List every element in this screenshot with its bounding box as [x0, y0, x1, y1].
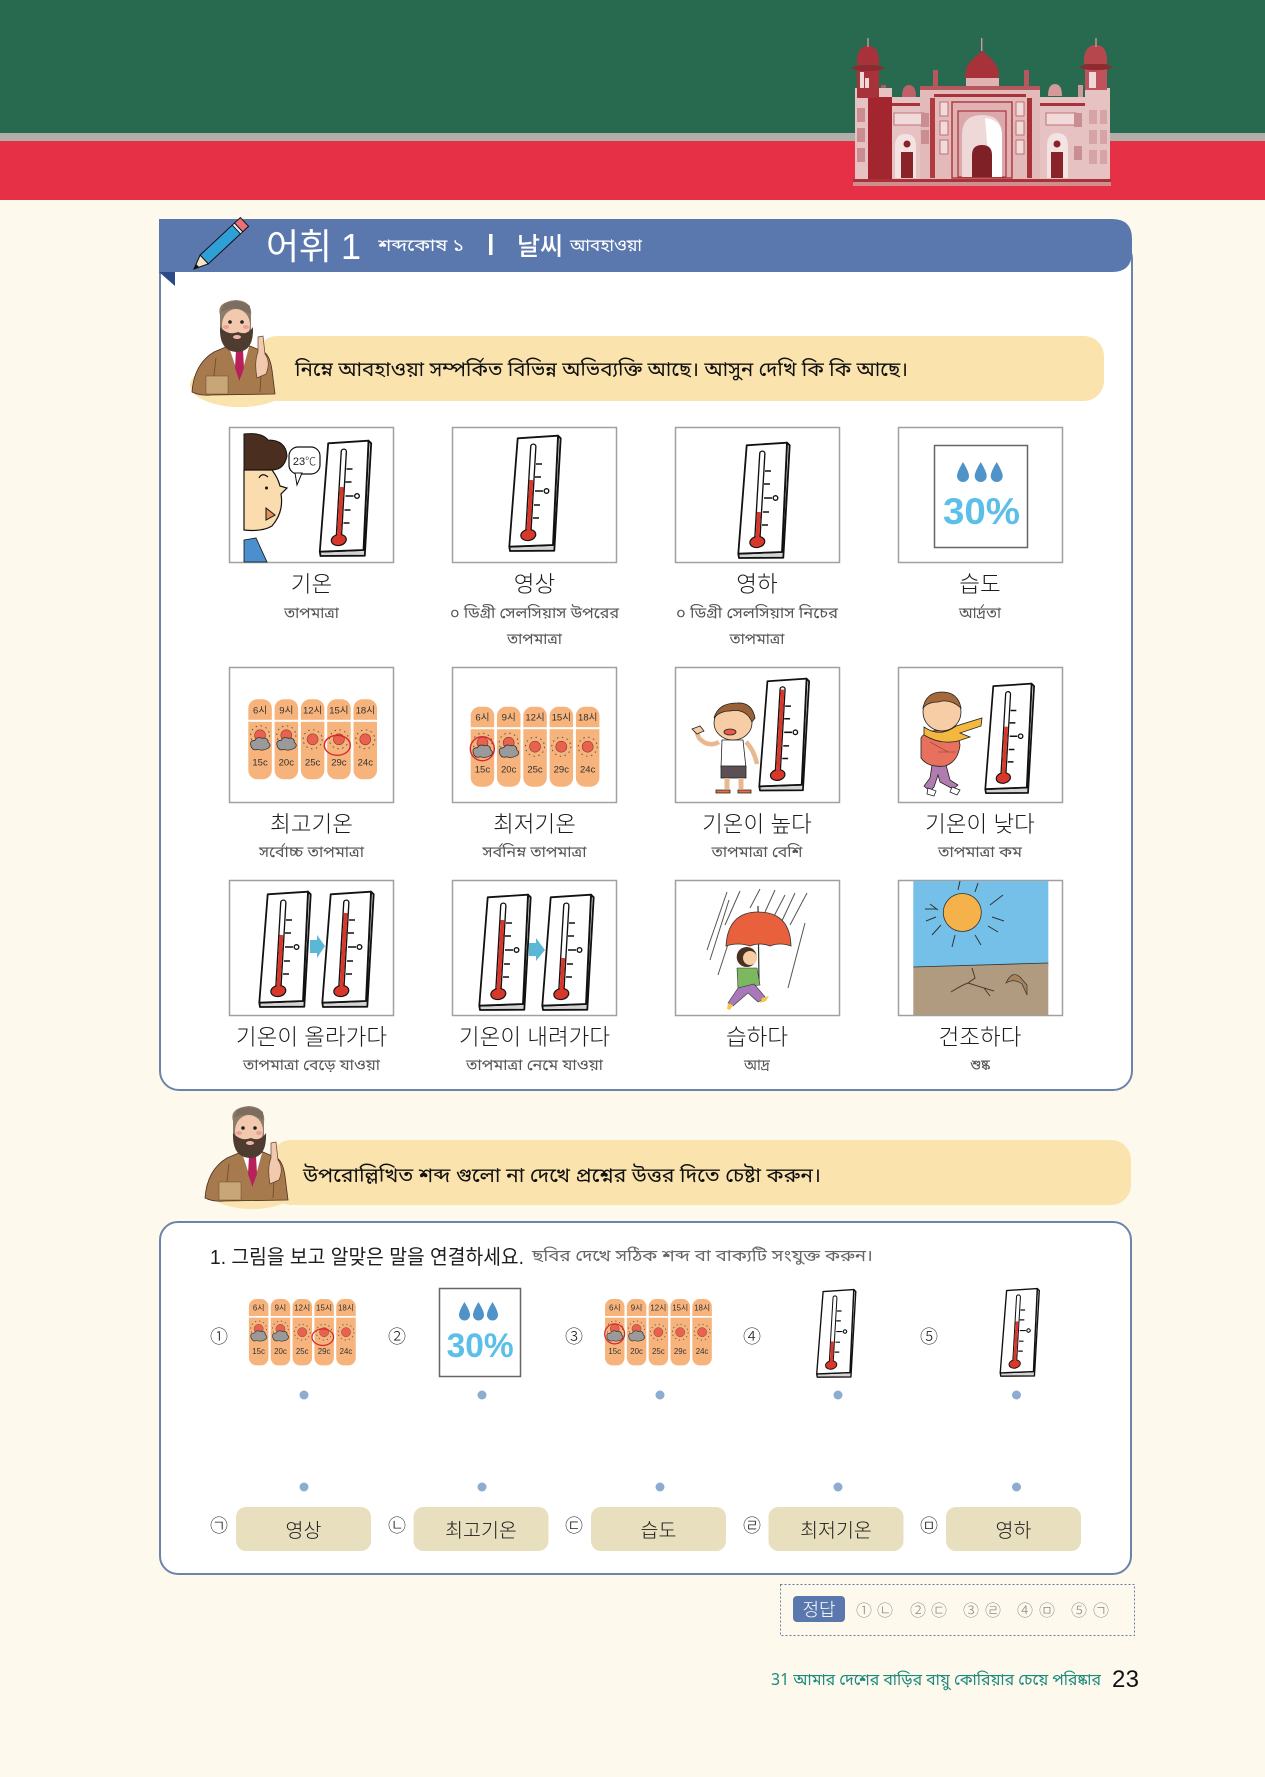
- chart: weather table: 25c: [305, 757, 321, 768]
- chart: weather table: 18시: [338, 1304, 354, 1313]
- translation: তাপমাত্রা বেড়ে যাওয়া: [242, 1057, 381, 1077]
- item 2: ②: [388, 1327, 406, 1347]
- translation: [676, 605, 839, 651]
- chart: weather table: 25c: [652, 1347, 665, 1356]
- answers: ②: [910, 1602, 926, 1620]
- chart: weather table: 12시: [303, 705, 322, 716]
- chart: weather table: 15c: [252, 757, 268, 768]
- translation: তাপমাত্রা: [283, 605, 340, 625]
- chart: weather table: 15c: [252, 1347, 265, 1356]
- chart: weather table: 15시: [552, 713, 571, 724]
- chart: weather table: 15c: [475, 765, 490, 776]
- header corner fold: [159, 272, 175, 286]
- label: 영하: [736, 572, 778, 597]
- chart: weather table: 20c: [274, 1347, 287, 1356]
- option ㉤: [920, 1507, 1081, 1551]
- answer box: [780, 1584, 1134, 1636]
- chart: weather table: 6시: [253, 705, 267, 716]
- card: temperature rises: [230, 880, 394, 1077]
- heading: Bengali weather: আবহাওয়া: [569, 235, 642, 258]
- translation: তাপমাত্রা নেমে যাওয়া: [465, 1057, 604, 1077]
- page number: 23: [1112, 1666, 1139, 1693]
- card: lowest temperature: [452, 668, 616, 864]
- label: 최고기온: [270, 812, 353, 837]
- label: 기온이 높다: [702, 812, 812, 837]
- translation: সর্বোচ্চ তাপমাত্রা: [258, 843, 365, 864]
- chart: weather table: [470, 707, 600, 787]
- translation: তাপমাত্রা: [728, 631, 786, 651]
- chart: weather table: 18시: [356, 705, 375, 716]
- card: humidity: [898, 428, 1062, 625]
- divider bar: [489, 234, 492, 255]
- icon: thermometer: [759, 679, 809, 791]
- chart: weather table: 25c: [527, 765, 543, 776]
- icon: red palace: [852, 38, 1112, 186]
- option ㉤: ㉤: [920, 1516, 938, 1536]
- translation: তাপমাত্রা: [506, 631, 563, 651]
- item 1: [210, 1299, 356, 1365]
- answers: ①: [856, 1602, 872, 1620]
- icon: sun over cracked ground: [913, 881, 1048, 1015]
- label: 기온: [291, 572, 332, 597]
- card: air temperature: [230, 428, 394, 625]
- option ㉡: ㉡: [388, 1516, 406, 1536]
- translation: তাপমাত্রা কম: [937, 844, 1023, 864]
- chart: weather table: [248, 699, 377, 779]
- chart: weather table: 15c: [608, 1347, 621, 1356]
- icon: humidity 30%: [934, 446, 1028, 548]
- card: dry: [898, 880, 1062, 1077]
- option ㉢: ㉢: [565, 1516, 583, 1536]
- option ㉠: ㉠: [210, 1516, 228, 1536]
- card: highest temperature: [230, 668, 394, 864]
- option ㉡: 최고기온: [445, 1520, 517, 1542]
- question translation: ছবির দেখে সঠিক শব্দ বা বাক্যটি সংযুক্ত করুন।: [531, 1246, 873, 1268]
- chart: weather table: 15시: [316, 1304, 332, 1313]
- icon: thermometer: [738, 443, 790, 558]
- icon: boy with umbrella in rain: [707, 889, 807, 1010]
- icon: cold boy: [921, 692, 982, 796]
- chart: weather table: [605, 1299, 712, 1365]
- icon: teacher: [205, 1106, 288, 1201]
- answer badge: 정답: [802, 1600, 836, 1620]
- icon: thermometer: [320, 441, 371, 556]
- label: 습하다: [726, 1025, 788, 1050]
- chart: weather table: 15시: [672, 1304, 688, 1313]
- translation: ০ ডিগ্রী সেলসিয়াস নিচের: [676, 605, 839, 625]
- icon: boy: 23℃: [293, 456, 316, 468]
- icon: thermometer: [817, 1290, 856, 1377]
- option ㉠: 영상: [286, 1520, 321, 1542]
- answers: [856, 1602, 1109, 1620]
- answers: ㉠: [1093, 1602, 1109, 1620]
- item 5: ⑤: [920, 1327, 938, 1347]
- chart: weather table: 12시: [650, 1304, 666, 1313]
- icon: hot boy: [692, 703, 757, 793]
- top band: green, gray, red: [0, 0, 1265, 200]
- icon: humidity 30%: 30%: [447, 1327, 514, 1365]
- label: 기온이 낮다: [925, 812, 1035, 837]
- chart: weather table: 24c: [358, 757, 373, 768]
- chart: weather table: 29c: [331, 757, 347, 768]
- option ㉡: [388, 1507, 548, 1551]
- option ㉣: 최저기온: [800, 1520, 872, 1542]
- option ㉢: [565, 1507, 726, 1551]
- translation: শুষ্ক: [970, 1057, 990, 1077]
- chart: weather table: 29c: [318, 1347, 331, 1356]
- icon: thermometer after: [322, 892, 374, 1007]
- label: 최저기온: [493, 812, 576, 837]
- chart: weather table: 20c: [501, 765, 517, 776]
- card: humid: [676, 880, 840, 1077]
- callout: try without looking: [205, 1106, 1131, 1209]
- card: temperature is high: [676, 668, 840, 864]
- card: above zero: [450, 428, 620, 651]
- icon: thermometer: [985, 684, 1034, 793]
- option ㉠: [210, 1507, 371, 1551]
- item 1: ①: [210, 1327, 228, 1347]
- item 3: [565, 1299, 712, 1365]
- chart: weather table: 9시: [631, 1304, 642, 1313]
- chart: weather table: 12시: [525, 713, 545, 724]
- icon: thermometer after: [542, 895, 594, 1010]
- label: 건조하다: [939, 1025, 1021, 1050]
- chart: weather table: 18시: [694, 1304, 710, 1313]
- label: 기온이 내려가다: [459, 1025, 610, 1050]
- heading: weather: 날씨: [517, 233, 563, 261]
- heading: Bengali vocabulary: শব্দকোষ ১: [377, 235, 464, 258]
- panel: matching exercise: [160, 1222, 1131, 1574]
- icon: pencil: [190, 218, 249, 273]
- option ㉢: 습도: [641, 1520, 676, 1542]
- chart: weather table: 29c: [554, 765, 569, 776]
- option ㉣: [743, 1507, 904, 1551]
- chart: weather table: 12시: [294, 1304, 310, 1313]
- chart: weather table: 20c: [630, 1347, 643, 1356]
- arrow: [529, 938, 545, 961]
- chart: weather table: 6시: [253, 1304, 264, 1313]
- label: 영상: [514, 572, 555, 597]
- chart: weather table: 25c: [296, 1347, 309, 1356]
- translation: আদ্র: [743, 1057, 771, 1077]
- answers: ㉢: [931, 1602, 947, 1620]
- answers: ㉡: [877, 1602, 893, 1620]
- icon: thermometer before: [479, 895, 531, 1010]
- translation: ০ ডিগ্রী সেলসিয়াস উপরের: [450, 605, 620, 625]
- option ㉤: 영하: [996, 1520, 1031, 1542]
- callout text: উপরোল্লিখিত শব্দ গুলো না দেখে প্রশ্নের উত্তর দিতে চেষ্টা করুন।: [302, 1163, 821, 1191]
- translation: তাপমাত্রা বেশি: [710, 844, 803, 864]
- option ㉣: ㉣: [743, 1516, 761, 1536]
- label: 습도: [959, 572, 1001, 597]
- card: temperature is low: [898, 668, 1062, 864]
- intro text: নিম্নে আবহাওয়া সম্পর্কিত বিভিন্ন অভিব্যক্তি আছে। আসুন দেখি কি কি আছে।: [294, 356, 908, 385]
- answers: ㉤: [1039, 1602, 1055, 1620]
- heading: vocabulary 1: 어휘 1: [266, 226, 361, 267]
- icon: boy: [244, 434, 320, 562]
- arrow: [310, 935, 325, 958]
- icon: thermometer: [509, 436, 561, 551]
- chart: weather table: 24c: [580, 765, 596, 776]
- icon: thermometer before: [259, 892, 311, 1007]
- chart: weather table: 24c: [340, 1347, 352, 1356]
- footer title: 31 আমার দেশের বাড়ির বায়ু কোরিয়ার চেয়ে পরিষ্কার: [771, 1670, 1101, 1692]
- chart: weather table: 6시: [609, 1304, 621, 1313]
- item 3: ③: [565, 1327, 583, 1347]
- chart: weather table: 9시: [502, 713, 516, 724]
- chart: weather table: 20c: [279, 757, 294, 768]
- label: 기온이 올라가다: [236, 1025, 387, 1050]
- question: 1. 그림을 보고 알맞은 말을 연결하세요.: [210, 1246, 524, 1269]
- item 4: [743, 1290, 856, 1377]
- chart: weather table: 9시: [279, 705, 293, 716]
- answers: ③: [963, 1602, 979, 1620]
- answer badge: [793, 1596, 845, 1622]
- icon: thermometer: [1000, 1289, 1039, 1376]
- header bar: [159, 219, 1132, 272]
- answers: ④: [1017, 1602, 1033, 1620]
- card: below zero: [676, 428, 840, 651]
- answers: ⑤: [1071, 1602, 1087, 1620]
- chart: weather table: 6시: [475, 713, 489, 724]
- chart: weather table: 29c: [674, 1347, 687, 1356]
- chart: weather table: 18시: [578, 713, 597, 724]
- chart: weather table: [249, 1299, 356, 1365]
- item 2: [388, 1288, 520, 1376]
- translation: [450, 605, 620, 651]
- chart: weather table: 24c: [696, 1347, 709, 1356]
- chart: weather table: 9시: [275, 1304, 286, 1313]
- translation: আর্দ্রতা: [958, 604, 1002, 625]
- icon: teacher: [192, 300, 275, 395]
- item 5: [920, 1289, 1039, 1376]
- panel: vocabulary: [159, 218, 1132, 1090]
- icon: humidity 30%: 30%: [943, 491, 1020, 532]
- chart: weather table: 15시: [329, 705, 349, 716]
- callout: intro: [190, 300, 1104, 407]
- translation: সর্বনিম্ন তাপমাত্রা: [481, 843, 588, 864]
- connection dots: [300, 1390, 1021, 1492]
- card: temperature falls: [452, 880, 616, 1077]
- answers: ㉣: [985, 1602, 1001, 1620]
- item 4: ④: [743, 1327, 761, 1347]
